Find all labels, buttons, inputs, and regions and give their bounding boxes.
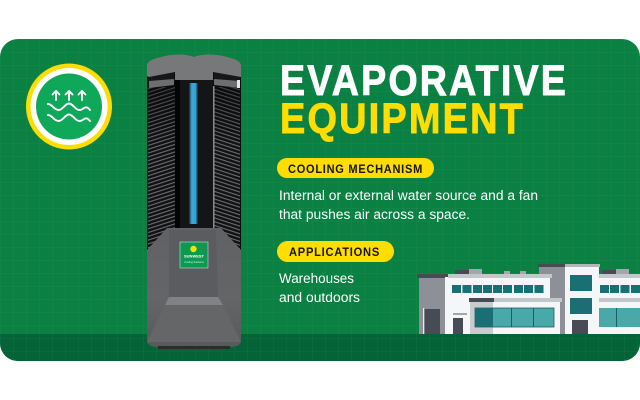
base housing: [147, 228, 241, 347]
blue light strip: [189, 83, 198, 224]
right louvres: [213, 87, 240, 250]
left grey block: [419, 278, 445, 334]
brand label: SUNWEST: [184, 254, 205, 258]
louvre shading: [148, 87, 240, 147]
title: EVAPORATIVE: [280, 57, 568, 105]
grey tower: [539, 265, 565, 334]
upper window strip: [452, 285, 544, 293]
heading pill: cooling mechanism: [277, 158, 434, 178]
brand label: Cooling Solutions: [184, 261, 204, 264]
unit body: [147, 72, 241, 252]
garage door: [423, 308, 424, 334]
left louvres: [148, 87, 175, 250]
heading pill: applications: [277, 241, 394, 262]
ground band: [0, 334, 640, 361]
top cap: [147, 55, 241, 80]
icon: water evaporation badge: [26, 64, 112, 150]
right wing: [599, 277, 640, 334]
text block: cooling description: Internal or external water source and a fan: [279, 188, 538, 203]
main white block: [445, 277, 550, 334]
illustration: evaporative cooler unit: [147, 55, 241, 349]
text block: cooling description: that pushes air across a space.: [279, 207, 470, 222]
upper glossy trim: [149, 72, 174, 88]
storefront block: [470, 302, 560, 334]
title: [280, 57, 568, 143]
text block: cooling description: [279, 188, 538, 222]
heading pill: cooling mechanism: COOLING MECHANISM: [288, 162, 423, 176]
illustration: warehouse building: [417, 264, 640, 334]
glass storefront: [475, 308, 554, 327]
text block: applications description: [279, 271, 360, 305]
centre column: [175, 80, 213, 230]
base lower section: [147, 305, 241, 342]
base recess panel: [169, 230, 218, 297]
text block: applications description: Warehouses: [279, 271, 354, 286]
unit feet: [158, 346, 230, 349]
text block: applications description: and outdoors: [279, 290, 360, 305]
white tower: [565, 265, 599, 334]
brand label: [180, 242, 208, 268]
entry door: [453, 318, 463, 334]
title: EQUIPMENT: [280, 95, 525, 143]
base ledge: [165, 297, 223, 305]
heading pill: applications: APPLICATIONS: [289, 245, 380, 259]
